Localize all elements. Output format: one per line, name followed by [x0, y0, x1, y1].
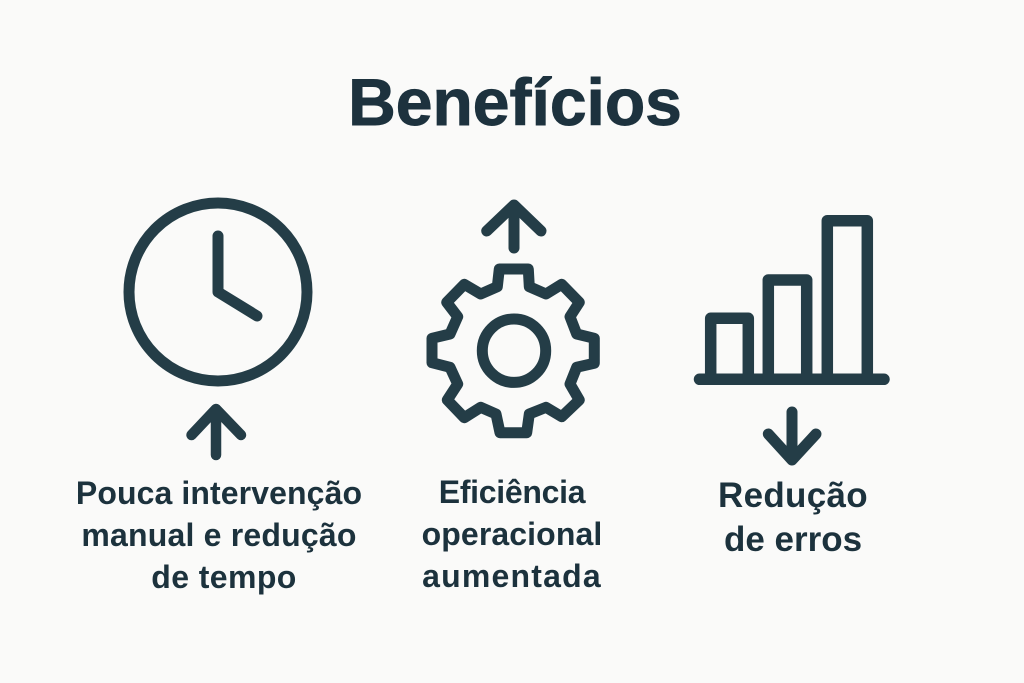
icon: gear	[432, 269, 594, 433]
icon: clock	[129, 203, 307, 381]
text: eficiência operacional: aumentada	[422, 558, 602, 594]
arrow: up above gear	[487, 205, 541, 248]
text: redução de erros: Redução	[718, 476, 868, 515]
text: redução de erros: de erros	[724, 520, 862, 559]
icon: bar chart	[700, 221, 884, 379]
text: pouca intervenção: Pouca intervenção	[76, 475, 362, 511]
text: pouca intervenção	[76, 475, 362, 595]
arrow: up under clock	[192, 409, 241, 455]
text: pouca intervenção: de tempo	[151, 559, 297, 595]
text: eficiência operacional	[422, 474, 602, 594]
text: eficiência operacional: operacional	[422, 516, 602, 552]
arrow: down under bar chart	[768, 412, 816, 460]
text: eficiência operacional: Eficiência	[439, 474, 585, 510]
title: Benefícios	[348, 65, 682, 139]
text: redução de erros	[718, 476, 868, 559]
text: pouca intervenção: manual e redução	[81, 517, 357, 553]
